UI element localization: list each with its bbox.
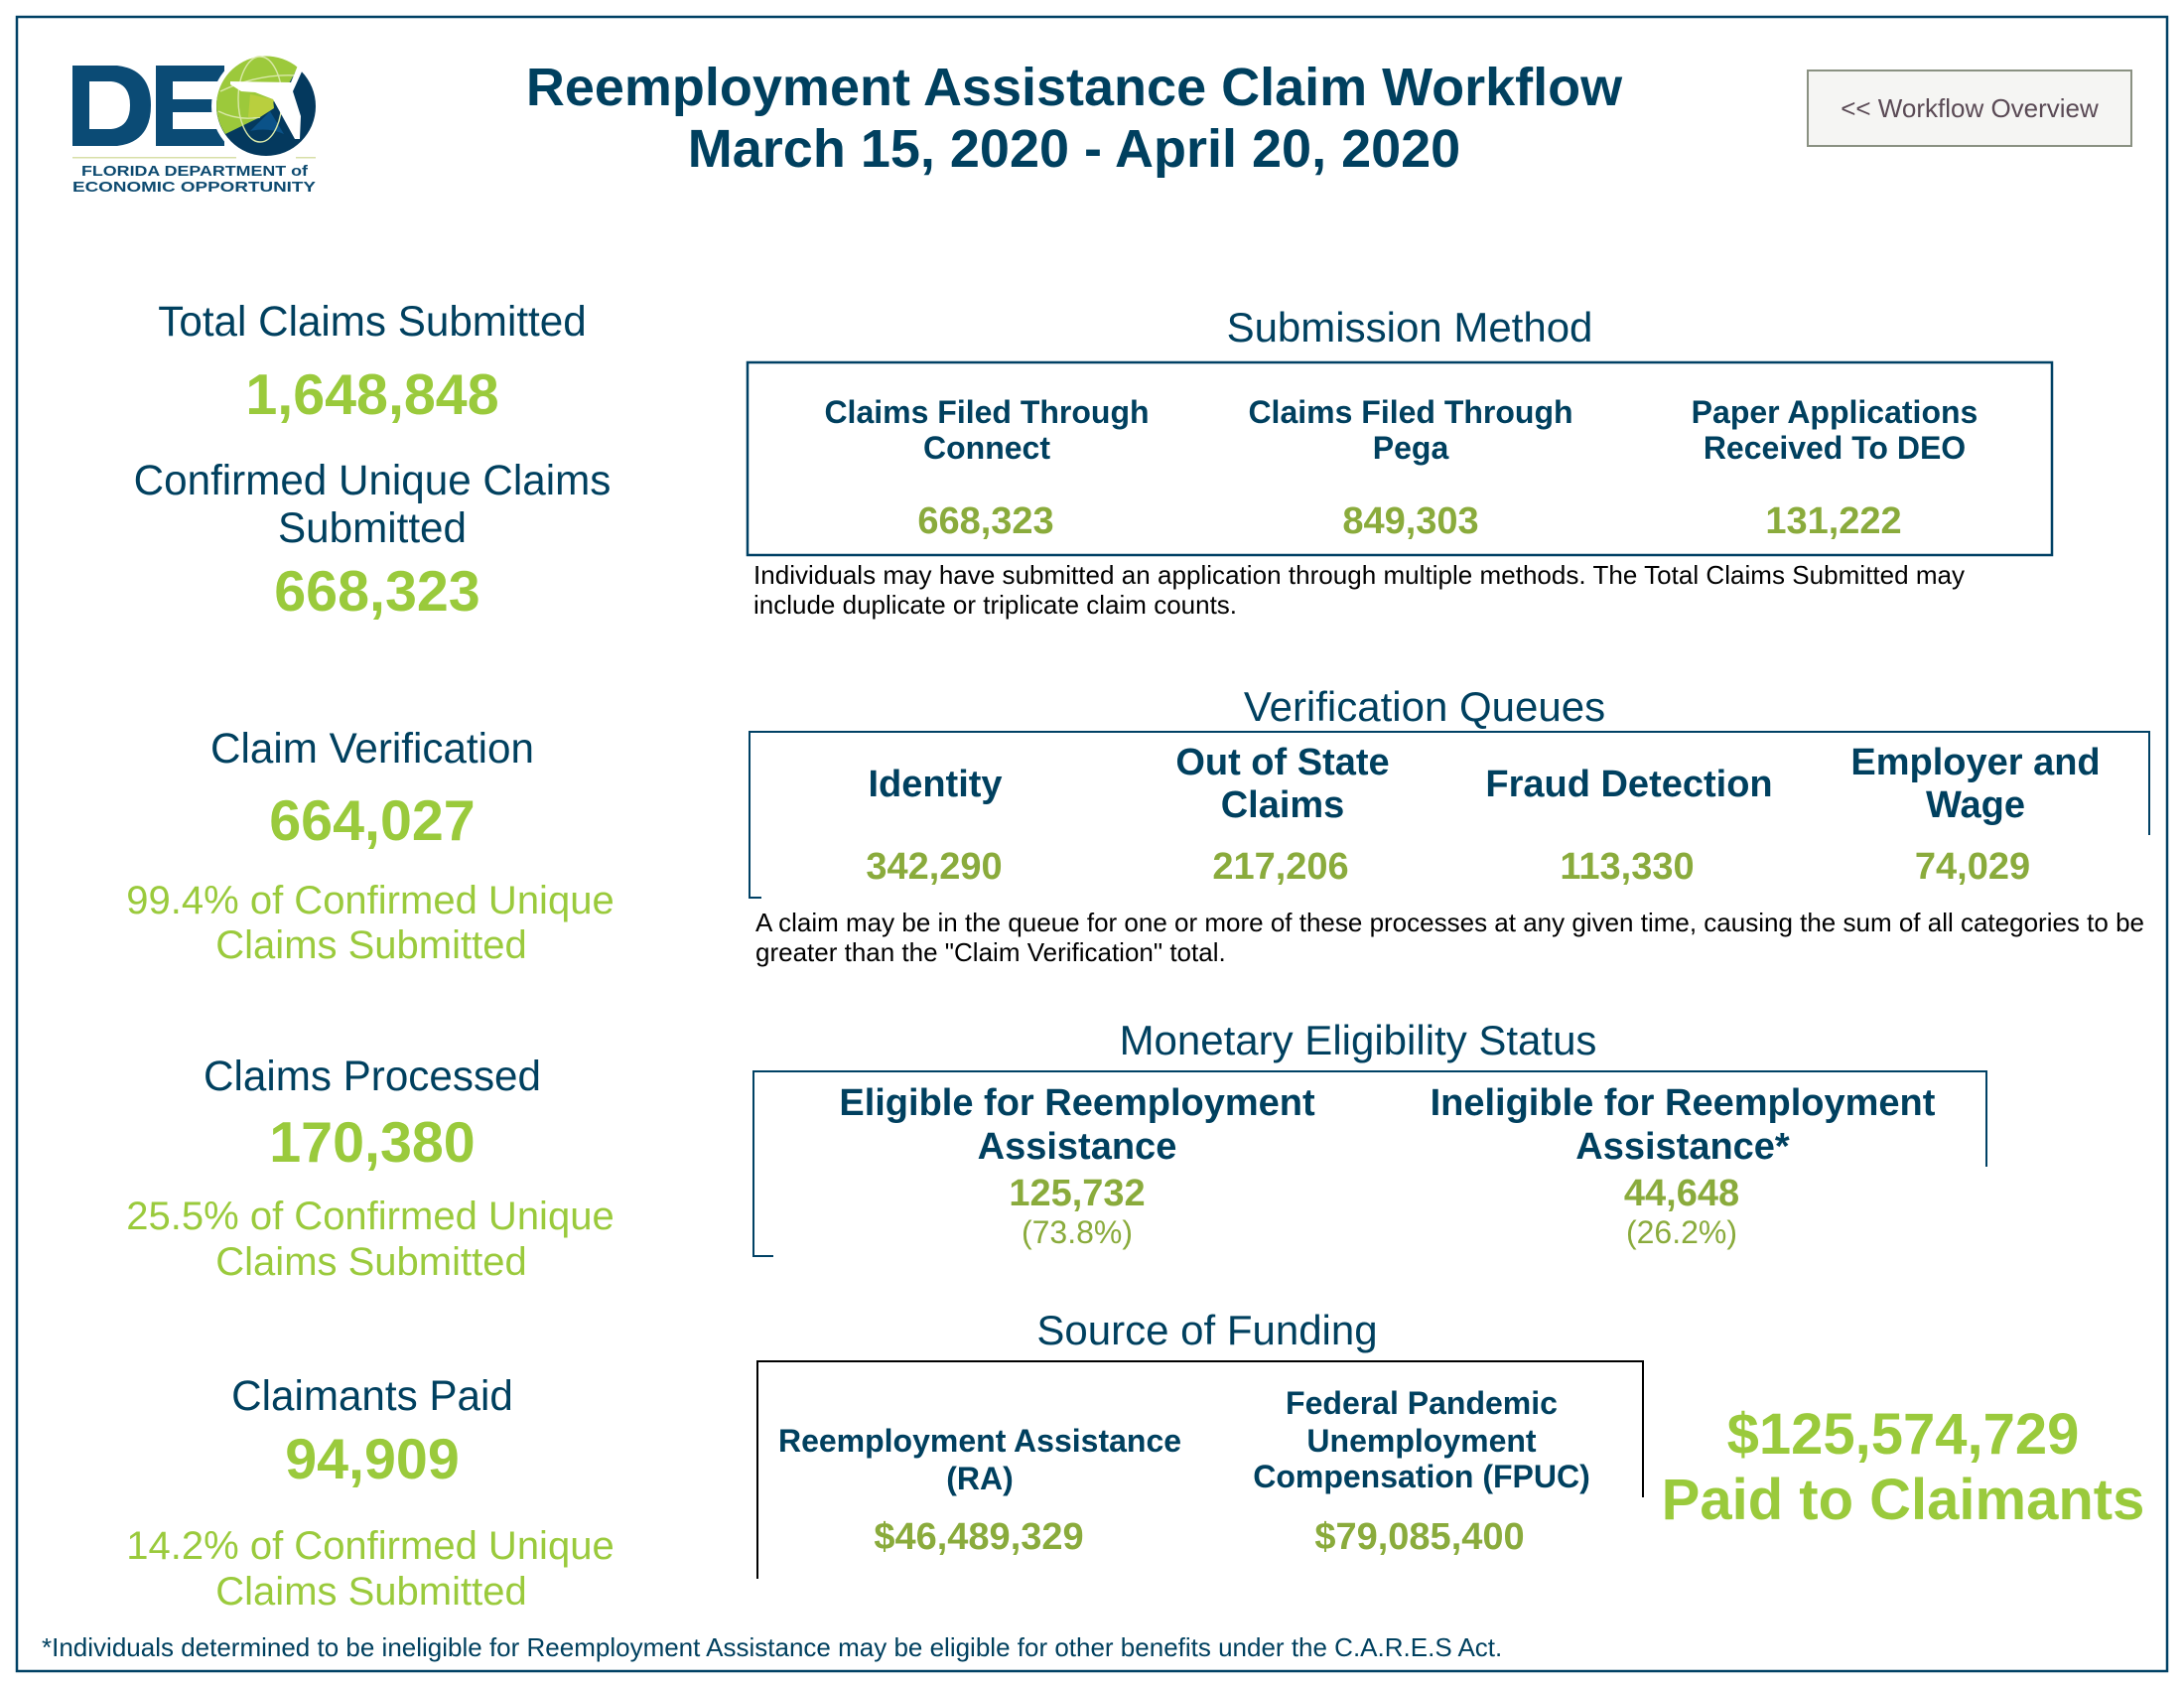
- stat: confirmed unique claims: [134, 457, 611, 624]
- panel: monetary eligibility status: 44,648: [1624, 1173, 1739, 1214]
- panel: source of funding: [757, 1307, 1643, 1579]
- note: submission method: include duplicate or triplicate claim counts.: [753, 590, 1237, 620]
- panel: source of funding: Reemployment Assistance: [778, 1423, 1181, 1459]
- stat: claim verification: [126, 725, 614, 967]
- stat: confirmed unique claims: Confirmed Unique Claims: [134, 457, 611, 503]
- stat: claimants paid: [126, 1372, 614, 1614]
- panel: monetary eligibility status: Assistance*: [1575, 1126, 1790, 1168]
- panel: source of funding: Unemployment: [1306, 1423, 1537, 1459]
- stat: claims processed: Claims Processed: [204, 1053, 541, 1099]
- panel: monetary eligibility status: (73.8%): [1022, 1214, 1133, 1250]
- footnote: *Individuals determined to be ineligible for Reemployment Assistance may be eligible for other benefits under the C.A.R.E.S Act.: [42, 1632, 1502, 1662]
- stat: claimants paid: Claims Submitted: [215, 1570, 527, 1614]
- logo: Florida Department of Economic Opportunity: ECONOMIC OPPORTUNITY: [72, 179, 316, 196]
- panel: submission method: Received To DEO: [1704, 430, 1966, 466]
- panel: verification queues: [750, 683, 2149, 898]
- panel: submission method: Claims Filed Through: [1248, 394, 1573, 430]
- panel: source of funding: Source of Funding: [1036, 1307, 1378, 1353]
- stat: claimants paid: 14.2% of Confirmed Unique: [126, 1524, 614, 1568]
- panel: verification queues: Employer and: [1850, 742, 2101, 783]
- callout: total paid to claimants: $125,574,729: [1727, 1402, 2079, 1467]
- panel: verification queues: Out of State: [1175, 742, 1390, 783]
- panel: monetary eligibility status: Assistance: [978, 1126, 1176, 1168]
- logo: Florida Department of Economic Opportunity: [72, 52, 321, 196]
- panel: verification queues: Claims: [1221, 784, 1344, 826]
- panel: submission method: 131,222: [1765, 500, 1902, 542]
- title: Reemployment Assistance Claim Workflow: [526, 58, 1623, 117]
- panel: verification queues: Identity: [868, 764, 1003, 805]
- panel: submission method: 849,303: [1342, 500, 1479, 542]
- button: workflow overview: << Workflow Overview: [1841, 93, 2099, 123]
- stat: claimants paid: Claimants Paid: [231, 1372, 513, 1419]
- note: verification queues: greater than the "Claim Verification" total.: [755, 937, 1226, 967]
- stat: claims processed: [126, 1053, 614, 1284]
- panel: monetary eligibility status: Eligible for Reemployment: [839, 1082, 1315, 1124]
- stat: claim verification: 664,027: [269, 789, 476, 853]
- panel: verification queues: 217,206: [1212, 846, 1349, 888]
- panel: source of funding: Federal Pandemic: [1286, 1385, 1558, 1421]
- panel: source of funding: Compensation (FPUC): [1253, 1459, 1590, 1494]
- callout: total paid to claimants: Paid to Claimants: [1662, 1468, 2144, 1532]
- logo: Florida Department of Economic Opportunity: FLORIDA DEPARTMENT of: [81, 163, 309, 180]
- stat: claim verification: Claims Submitted: [215, 923, 527, 967]
- stat: total claims submitted: Total Claims Submitted: [158, 298, 587, 345]
- panel: submission method: Connect: [923, 430, 1050, 466]
- stat: total claims submitted: 1,648,848: [245, 363, 499, 427]
- panel: monetary eligibility status: (26.2%): [1626, 1214, 1737, 1250]
- panel: submission method: Paper Applications: [1692, 394, 1978, 430]
- stat: claims processed: 170,380: [269, 1111, 476, 1175]
- panel: monetary eligibility status: Monetary Eligibility Status: [1120, 1017, 1596, 1063]
- panel: verification queues: 342,290: [866, 846, 1003, 888]
- stat: claims processed: Claims Submitted: [215, 1240, 527, 1284]
- panel: submission method: Claims Filed Through: [824, 394, 1150, 430]
- panel: monetary eligibility status: 125,732: [1009, 1173, 1146, 1214]
- stat: confirmed unique claims: 668,323: [274, 560, 480, 624]
- panel: source of funding: $79,085,400: [1314, 1516, 1525, 1558]
- panel: verification queues: Fraud Detection: [1485, 764, 1773, 805]
- stat: total claims submitted: [158, 298, 587, 427]
- note: verification queues: [755, 908, 2144, 967]
- panel: verification queues: Verification Queues: [1244, 683, 1605, 730]
- panel: monetary eligibility status: [753, 1017, 1986, 1256]
- panel: source of funding: (RA): [946, 1461, 1014, 1496]
- title: March 15, 2020 - April 20, 2020: [688, 119, 1460, 179]
- panel: submission method: [748, 304, 2052, 555]
- stat: confirmed unique claims: Submitted: [278, 504, 467, 551]
- stat: claim verification: Claim Verification: [210, 725, 534, 772]
- panel: verification queues: 113,330: [1560, 846, 1695, 888]
- stat: claimants paid: 94,909: [285, 1428, 460, 1491]
- panel: submission method: Pega: [1373, 430, 1448, 466]
- panel: submission method: Submission Method: [1227, 304, 1592, 351]
- button: workflow overview: [1808, 70, 2131, 146]
- note: verification queues: A claim may be in the queue for one or more of these processes at any given time, causing the sum of all categories to be: [755, 908, 2144, 937]
- note: submission method: [753, 560, 1965, 620]
- stat: claims processed: 25.5% of Confirmed Unique: [126, 1195, 614, 1238]
- callout: total paid to claimants: [1662, 1402, 2144, 1532]
- panel: monetary eligibility status: Ineligible for Reemployment: [1431, 1082, 1936, 1124]
- note: submission method: Individuals may have submitted an application through multiple methods. The Total Claims Submitted may: [753, 560, 1965, 590]
- title: [526, 58, 1623, 179]
- panel: verification queues: 74,029: [1915, 846, 2030, 888]
- panel: verification queues: Wage: [1926, 784, 2025, 826]
- panel: submission method: 668,323: [917, 500, 1054, 542]
- panel: source of funding: $46,489,329: [874, 1516, 1084, 1558]
- stat: claim verification: 99.4% of Confirmed Unique: [126, 879, 614, 922]
